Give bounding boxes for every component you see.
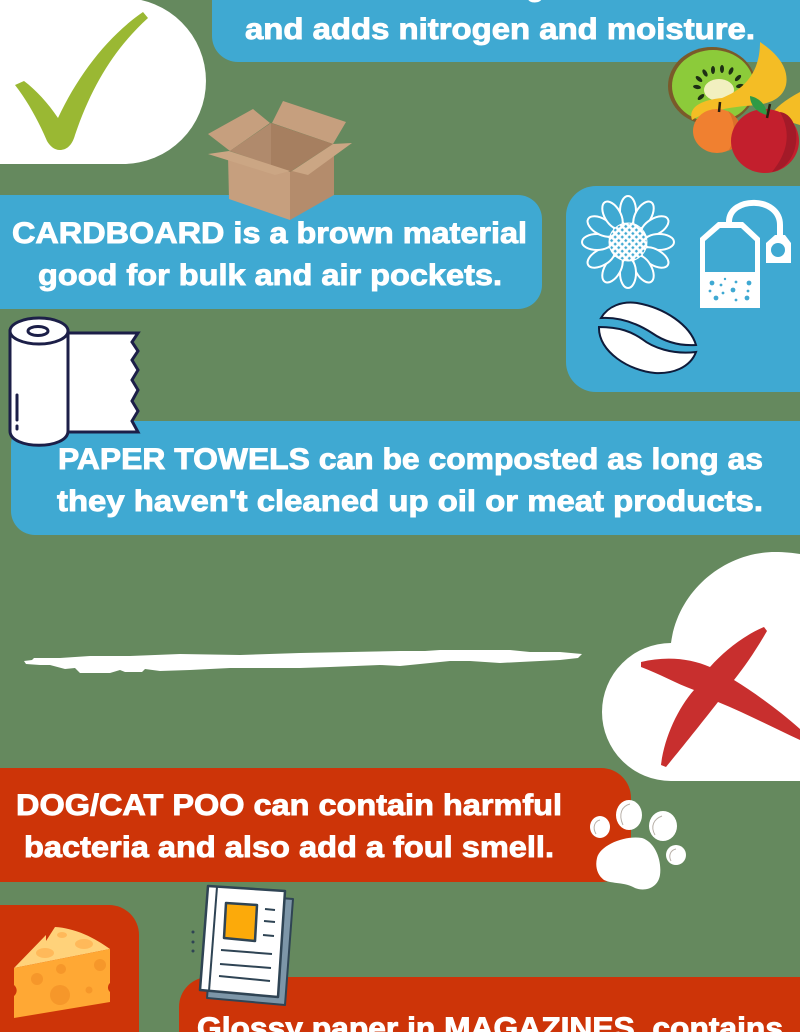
icon: cheese wedge: [14, 927, 110, 1018]
bananas: [691, 42, 787, 120]
icon: red cross on white cloud: [602, 552, 800, 781]
panel: magazines: [179, 977, 800, 1032]
panel: nitrogen and moisture: and adds nitrogen and moisture.: [245, 13, 755, 46]
icon: cardboard box: [208, 101, 352, 220]
icon: paper towel roll: [10, 318, 138, 445]
panel: cardboard: [0, 195, 542, 309]
icon: tea bag: [700, 203, 791, 308]
panel: dog and cat poo: DOG/CAT POO can contain harmful: [16, 789, 562, 822]
panel: paper towels: PAPER TOWELS can be composted as long as: [58, 443, 763, 476]
panel: cheese: [0, 905, 139, 1032]
icon: green check mark on white blob: [0, 0, 206, 164]
icon: coffee bean: [599, 303, 696, 373]
kiwi: [668, 47, 756, 125]
icon: paw print: [590, 800, 686, 889]
panel: cardboard: CARDBOARD is a brown material: [12, 217, 527, 250]
panel: paper towels: [11, 421, 800, 535]
icon: flower: [582, 196, 674, 288]
panel: nitrogen and moisture: [212, 0, 800, 62]
panel: paper towels: they haven't cleaned up oil or meat products.: [57, 485, 763, 518]
panel: browns and greens icons: [566, 186, 800, 392]
panel: dog and cat poo: [0, 768, 631, 882]
panel: dog and cat poo: bacteria and also add a foul smell.: [24, 831, 554, 864]
peach: [693, 109, 741, 153]
panel: cardboard: good for bulk and air pockets.: [38, 259, 502, 292]
icon: magazine: [192, 886, 293, 1005]
icon: fruit pile: [668, 42, 800, 173]
apple: [731, 109, 799, 173]
decorative heading brush stroke: [24, 650, 582, 673]
